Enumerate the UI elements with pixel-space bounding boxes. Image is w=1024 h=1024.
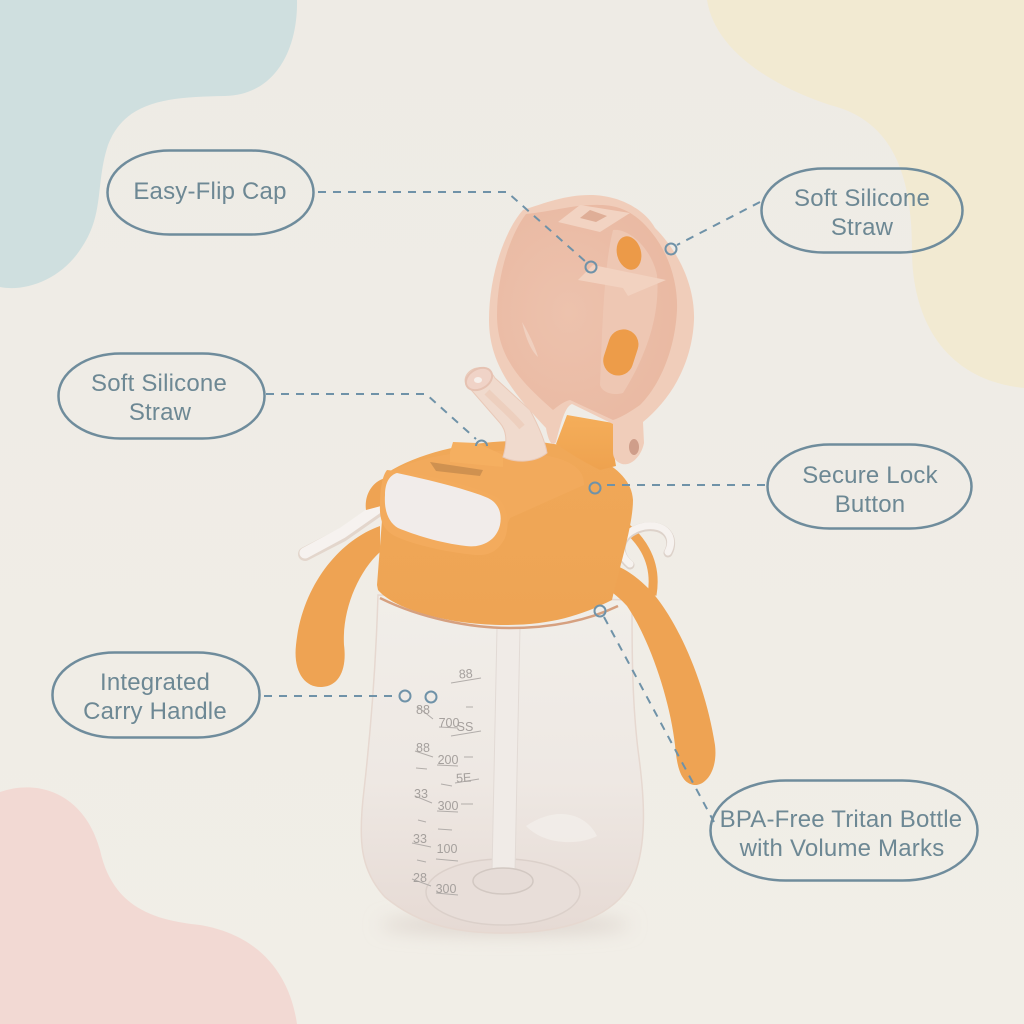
cap loop hole <box>580 210 607 222</box>
transparent bottle body <box>361 595 643 933</box>
callout: Soft Silicone Straw (left) <box>58 354 264 438</box>
volume numbers: 200 <box>438 753 458 767</box>
volume marks <box>412 678 481 895</box>
lid slot <box>430 462 483 476</box>
handle left upper stub <box>366 478 385 510</box>
volume numbers: 33 <box>413 832 427 846</box>
volume numbers: 88 <box>416 741 430 755</box>
volume numbers <box>413 667 473 896</box>
background blob: blue <box>0 0 297 288</box>
leader line: Soft Silicone Straw left <box>266 394 487 446</box>
callout: Soft Silicone Straw (left): Straw <box>129 399 192 426</box>
lid body: orange <box>377 441 633 625</box>
cap seal: upper orange <box>613 233 645 273</box>
bottle base <box>426 859 580 925</box>
button housing <box>380 470 508 555</box>
callout: Secure Lock Button: Button <box>835 491 905 518</box>
lock button: white <box>385 473 501 546</box>
hinge hole <box>629 439 639 455</box>
flip cap: inner pink <box>497 205 677 420</box>
leader line: Secure Lock Button <box>590 482 765 494</box>
lid raised section <box>388 451 584 540</box>
leader line: Integrated Carry Handle <box>264 690 436 702</box>
volume numbers: 88 <box>416 703 430 717</box>
volume numbers: 100 <box>437 842 457 856</box>
callout: BPA-Free Tritan Bottle with Volume Marks: BPA-Free Tritan Bottle <box>720 806 962 833</box>
straw <box>492 628 520 872</box>
cap hook: upper rectangular loop <box>558 205 630 232</box>
strap: left white <box>305 505 382 554</box>
callout: Secure Lock Button: Secure Lock <box>802 462 939 489</box>
callout: Secure Lock Button <box>768 444 972 528</box>
callout: Integrated Carry Handle <box>52 652 260 738</box>
leader line: Soft Silicone Straw right <box>666 202 760 254</box>
product: sippy bottle <box>296 195 715 934</box>
handle: right <box>597 564 715 785</box>
lid upper tab <box>450 442 503 467</box>
handle: left <box>296 526 380 687</box>
callout: BPA-Free Tritan Bottle with Volume Marks: with Volume Marks <box>739 835 944 862</box>
callout: Soft Silicone Straw (left): Soft Silicone <box>91 370 227 397</box>
callout: Soft Silicone Straw (right): Straw <box>831 214 894 241</box>
leader line: BPA-Free Tritan Bottle <box>594 606 714 822</box>
volume numbers: 28 <box>413 871 427 885</box>
straw spout: silicone <box>462 363 547 461</box>
callout: Soft Silicone Straw (right) <box>762 168 962 252</box>
callout: Soft Silicone Straw (right): Soft Silicone <box>794 185 930 212</box>
callout: BPA-Free Tritan Bottle with Volume Marks <box>710 780 978 880</box>
handle right loop <box>614 519 653 595</box>
volume numbers: 33 <box>414 787 428 801</box>
hinge: orange <box>556 415 616 470</box>
background blob: pink <box>0 787 297 1024</box>
callout: Integrated Carry Handle: Integrated <box>100 669 210 696</box>
callout: Integrated Carry Handle: Carry Handle <box>83 698 227 725</box>
callout: Easy-Flip Cap: Easy-Flip Cap <box>133 178 287 205</box>
ground shadow <box>380 916 630 934</box>
cap shelf <box>578 265 666 296</box>
volume numbers: SS <box>457 720 473 734</box>
straw foot <box>473 868 533 894</box>
cap glare <box>522 322 538 357</box>
flip cap: outer shell <box>489 195 694 464</box>
bottle highlight <box>526 814 597 842</box>
strap ring: right <box>621 526 671 565</box>
volume numbers: 300 <box>436 882 456 896</box>
callout: Easy-Flip Cap <box>108 150 314 234</box>
cap inner recess <box>600 230 658 394</box>
volume numbers: 700 <box>439 716 459 730</box>
lid rim shadow <box>380 598 618 628</box>
volume numbers: 5E <box>456 770 472 786</box>
volume numbers: 88 <box>458 667 473 681</box>
cap seal: lower orange <box>599 325 642 379</box>
background blob: yellow <box>707 0 1024 388</box>
leader line: Easy-Flip Cap <box>318 192 596 272</box>
volume numbers: 300 <box>438 799 458 813</box>
